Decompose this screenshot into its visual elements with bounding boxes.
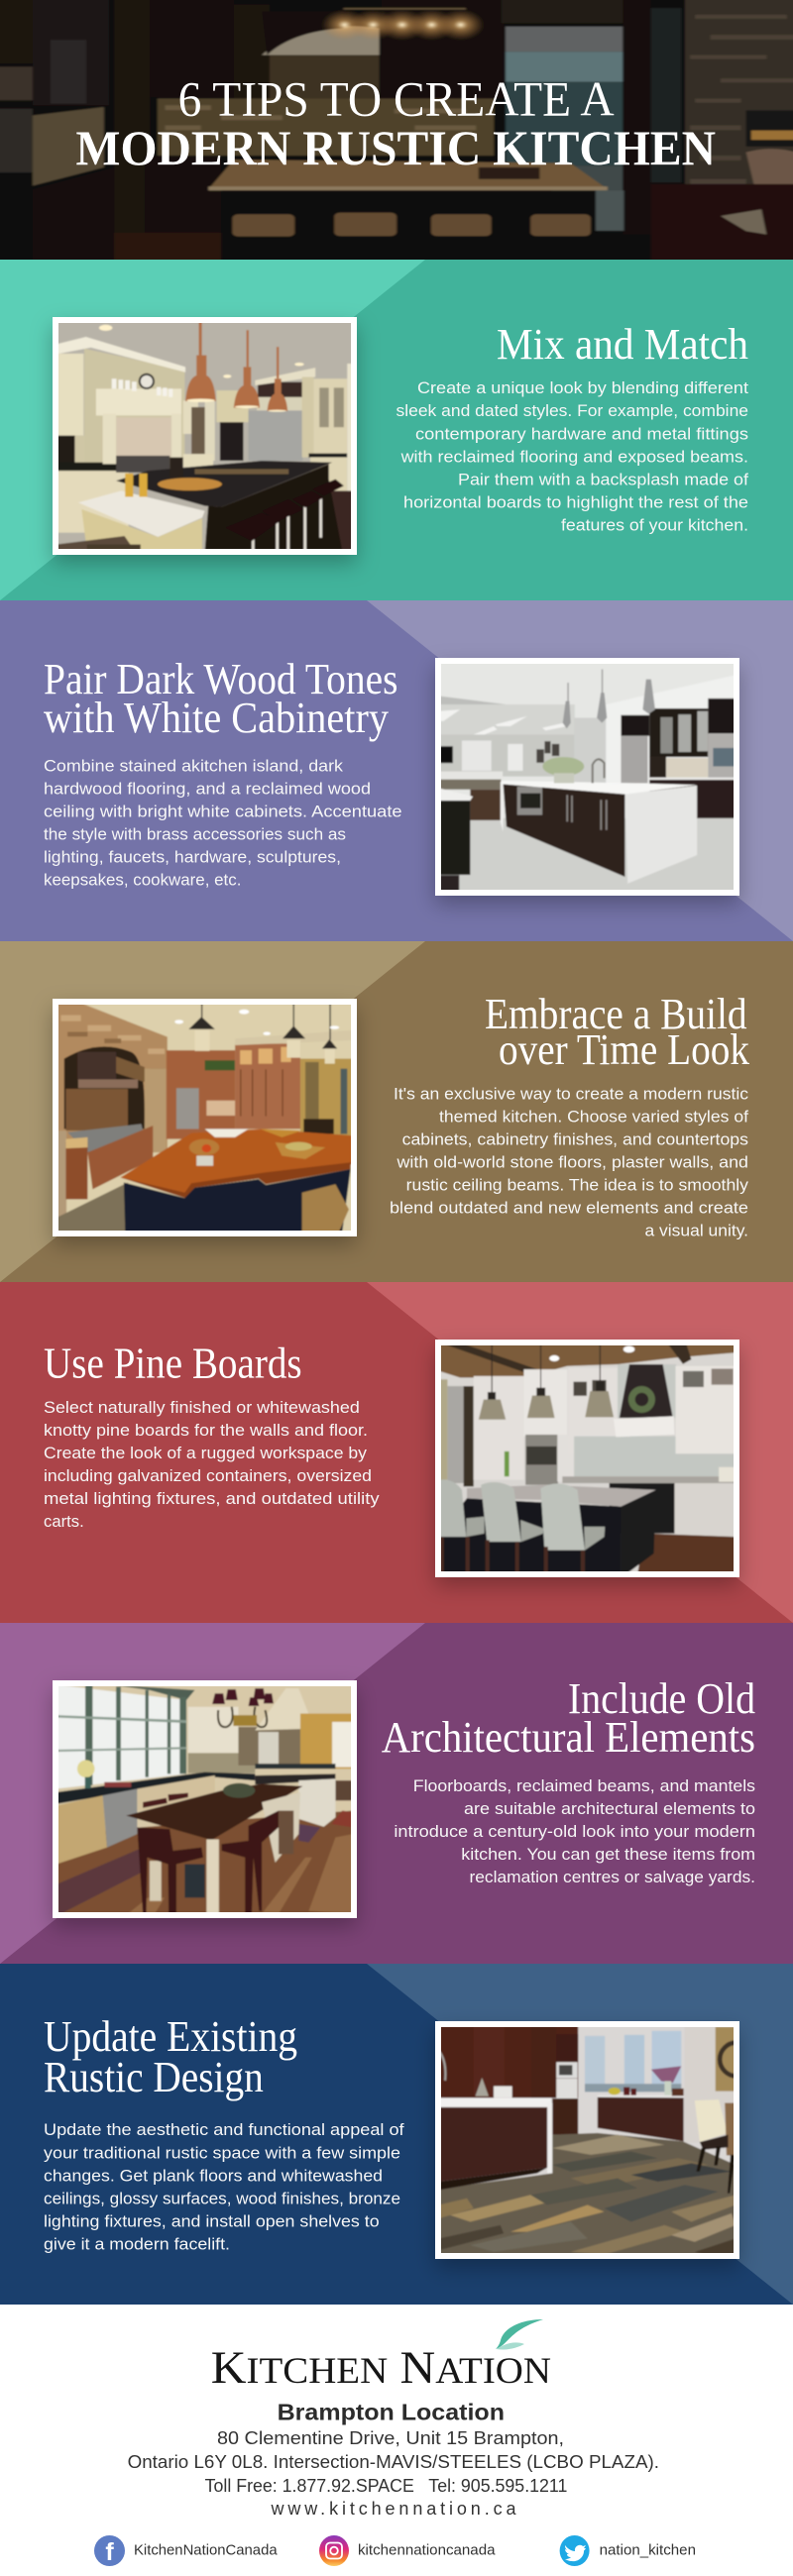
- heading: pair dark wood tones: with White Cabinetry: [44, 694, 389, 742]
- text block: pair dark wood tones: keepsakes, cookware, etc.: [44, 872, 241, 890]
- text block: pair dark wood tones: ceiling with bright white cabinets. Accentuate: [44, 803, 402, 820]
- social: facebook: KitchenNationCanada: [134, 2542, 278, 2558]
- text block: mix and match: Create a unique look by blending different: [417, 379, 748, 397]
- address and contact details: 80 Clementine Drive, Unit 15 Brampton,: [217, 2428, 564, 2448]
- panel: mix and match: [0, 260, 793, 600]
- text block: old architectural elements: introduce a century-old look into your modern: [394, 1823, 755, 1841]
- text block: build over time: a visual unity.: [644, 1223, 748, 1240]
- text block: pair dark wood tones: the style with brass accessories such as: [44, 826, 346, 844]
- text block: pair dark wood tones: Combine stained akitchen island, dark: [44, 757, 344, 775]
- social: facebook: [94, 2535, 278, 2566]
- heading: old architectural elements: Include Old: [568, 1674, 755, 1723]
- text block: old architectural elements: are suitable architectural elements to: [464, 1800, 755, 1818]
- panel: pair dark wood tones: [0, 600, 793, 941]
- logo wordmark: KITCHEN NATION: [211, 2342, 551, 2394]
- photo frame: copper pendant kitchen: [53, 317, 357, 555]
- text block: build over time: rustic ceiling beams. The idea is to smoothly: [406, 1177, 749, 1195]
- heading: old architectural elements: [382, 1674, 755, 1762]
- address and contact details: Ontario L6Y 0L8. Intersection-MAVIS/STEELES (LCBO PLAZA).: [128, 2452, 659, 2472]
- heading: build over time: [485, 990, 749, 1074]
- header banner: [0, 0, 793, 262]
- photo frame: white island kitchen: [435, 658, 739, 896]
- text block: update existing rustic design: [44, 2121, 404, 2253]
- text block: update existing rustic design: ceilings, glossy surfaces, wood finishes, bronze: [44, 2190, 400, 2207]
- panel: old architectural elements: [0, 1623, 793, 1964]
- text block: mix and match: [396, 379, 748, 535]
- heading: old architectural elements: Architectural Elements: [382, 1713, 755, 1762]
- heading: build over time: Embrace a Build: [485, 990, 747, 1038]
- social: twitter: nation_kitchen: [600, 2542, 696, 2558]
- text block: pair dark wood tones: [44, 757, 402, 890]
- text block: pine boards: [44, 1399, 380, 1531]
- heading: 6 TIPS TO CREATE A: [178, 71, 615, 127]
- text block: pair dark wood tones: lighting, faucets, hardware, sculptures,: [44, 848, 341, 866]
- photo frame: window kitchen with walnut table: [53, 1680, 357, 1918]
- text block: mix and match: with reclaimed flooring and exposed beams.: [400, 448, 748, 466]
- text block: build over time: cabinets, cabinetry finishes, and countertops: [402, 1131, 748, 1149]
- social: instagram: kitchennationcanada: [358, 2542, 496, 2558]
- photo frame: stone arch kitchen: [53, 999, 357, 1236]
- footer: [0, 2305, 793, 2576]
- text block: build over time: It's an exclusive way to create a modern rustic: [394, 1086, 748, 1104]
- text block: pine boards: knotty pine boards for the walls and floor.: [44, 1422, 368, 1440]
- text block: mix and match: features of your kitchen.: [561, 517, 748, 535]
- text block: pine boards: carts.: [44, 1513, 84, 1531]
- text block: build over time: [390, 1086, 749, 1240]
- heading: use pine boards: Use Pine Boards: [44, 1340, 302, 1387]
- heading: build over time: over Time Look: [499, 1025, 749, 1074]
- text block: old architectural elements: [394, 1777, 755, 1886]
- photo frame: white cabinets with wood ceiling: [435, 1340, 739, 1577]
- heading: pair dark wood tones: Pair Dark Wood Tones: [44, 655, 398, 703]
- heading: [75, 71, 716, 175]
- heading: update existing rustic design: Rustic Design: [44, 2053, 264, 2101]
- icon: logo leaf: [496, 2319, 543, 2350]
- address and contact details: www.kitchennation.ca: [270, 2499, 516, 2519]
- logo: kitchen nation: [211, 2319, 551, 2394]
- text block: old architectural elements: reclamation centres or salvage yards.: [470, 1869, 755, 1886]
- text block: old architectural elements: Floorboards, reclaimed beams, and mantels: [413, 1777, 755, 1795]
- heading: update existing rustic design: [44, 2012, 297, 2101]
- heading: mix and match: Mix and Match: [497, 320, 748, 369]
- panel: update existing rustic design: [0, 1964, 793, 2305]
- social: twitter: [560, 2535, 696, 2566]
- text block: update existing rustic design: Update the aesthetic and functional appeal of: [44, 2121, 404, 2139]
- text block: mix and match: contemporary hardware and metal fittings: [415, 426, 748, 444]
- heading: pair dark wood tones: [44, 655, 398, 742]
- text block: build over time: blend outdated and new elements and create: [390, 1199, 748, 1217]
- banner kitchen photo: [0, 0, 793, 260]
- text block: mix and match: sleek and dated styles. For example, combine: [396, 402, 748, 420]
- heading: update existing rustic design: Update Existing: [44, 2012, 297, 2061]
- text block: mix and match: Pair them with a backsplash made of: [458, 472, 748, 489]
- location heading: Brampton Location: [278, 2400, 505, 2425]
- text block: update existing rustic design: changes. Get plank floors and whitewashed: [44, 2168, 383, 2186]
- text block: update existing rustic design: lighting fixtures, and install open shelves to: [44, 2213, 380, 2231]
- photo frame: plank floor kitchen: [435, 2021, 753, 2259]
- address and contact details: [128, 2428, 659, 2519]
- text block: update existing rustic design: your traditional rustic space with a few simple: [44, 2144, 400, 2162]
- address and contact details: Toll Free: 1.877.92.SPACE Tel: 905.595.1211: [205, 2476, 567, 2496]
- panel: build over time: [0, 941, 793, 1282]
- text block: pair dark wood tones: hardwood flooring, and a reclaimed wood: [44, 781, 371, 799]
- text block: pine boards: including galvanized containers, oversized: [44, 1467, 372, 1485]
- social: instagram: [319, 2535, 496, 2566]
- text block: mix and match: horizontal boards to highlight the rest of the: [403, 493, 748, 511]
- text block: build over time: themed kitchen. Choose varied styles of: [439, 1108, 748, 1126]
- text block: update existing rustic design: give it a modern facelift.: [44, 2235, 230, 2253]
- text block: pine boards: metal lighting fixtures, and outdated utility: [44, 1490, 380, 1508]
- panel: pine boards: [0, 1282, 793, 1623]
- text block: pine boards: Select naturally finished or whitewashed: [44, 1399, 360, 1417]
- heading: MODERN RUSTIC KITCHEN: [75, 120, 716, 175]
- text block: old architectural elements: kitchen. You can get these items from: [461, 1846, 755, 1864]
- text block: pine boards: Create the look of a rugged workspace by: [44, 1445, 368, 1462]
- social: facebook: f: [105, 2538, 114, 2566]
- text block: build over time: with old-world stone floors, plaster walls, and: [396, 1153, 748, 1171]
